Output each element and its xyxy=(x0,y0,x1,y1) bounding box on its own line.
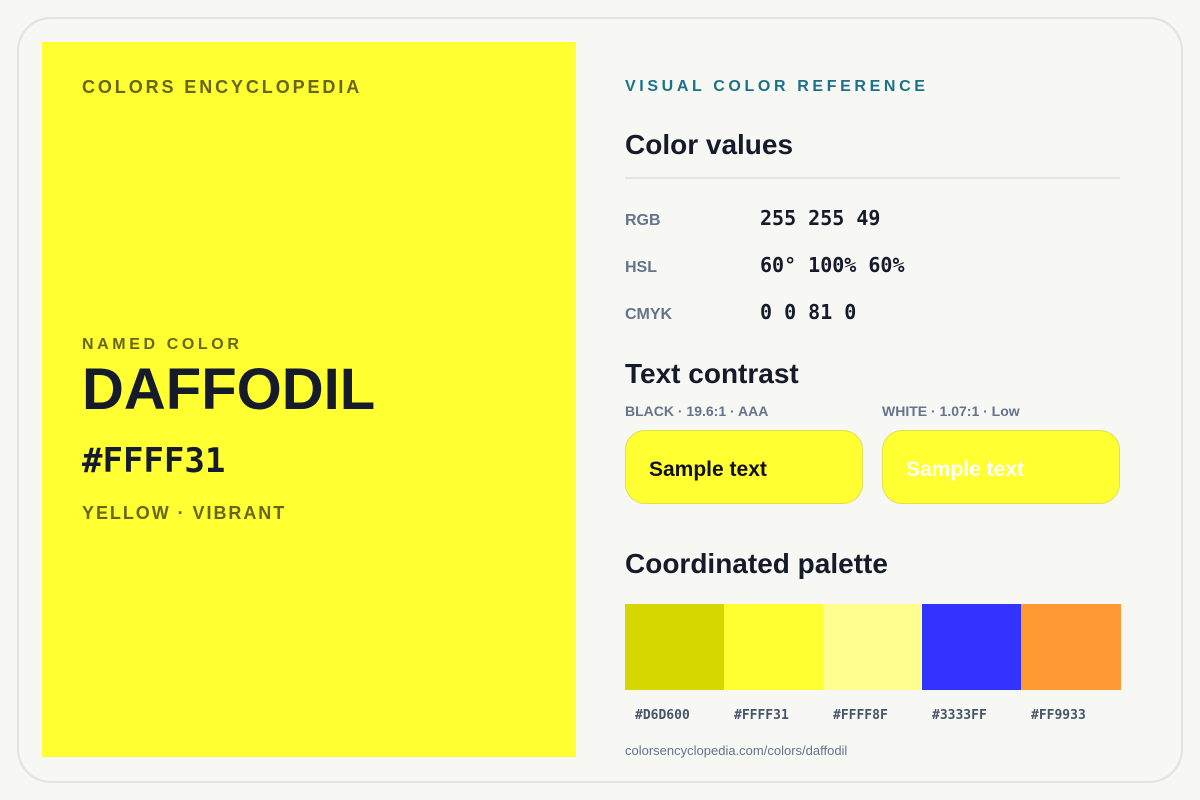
category tags: YELLOW · VIBRANT xyxy=(82,503,286,523)
HSL row xyxy=(625,253,904,277)
swatch 3333FF xyxy=(922,604,1021,690)
CMYK value: 0 0 81 0 xyxy=(760,300,856,324)
hex label FFFF8F: #FFFF8F xyxy=(833,708,888,723)
panel: color swatch xyxy=(42,42,576,757)
RGB value: 255 255 49 xyxy=(760,206,880,230)
swatch FFFF8F xyxy=(823,604,922,690)
heading: text contrast: Text contrast xyxy=(625,358,799,389)
hex label FF9933: #FF9933 xyxy=(1031,708,1086,723)
named color label: NAMED COLOR xyxy=(82,336,242,353)
color name: DAFFODIL xyxy=(82,357,375,422)
RGB row xyxy=(625,206,880,230)
source URL: colorsencyclopedia.com/colors/daffodil xyxy=(625,743,847,758)
white contrast label: WHITE · 1.07:1 · Low xyxy=(882,403,1020,419)
hex label FFFF31: #FFFF31 xyxy=(734,708,789,723)
eyebrow label: VISUAL COLOR REFERENCE xyxy=(625,78,929,95)
hex label 3333FF: #3333FF xyxy=(932,708,987,723)
hex label D6D600: #D6D600 xyxy=(635,708,690,723)
palette strip xyxy=(625,604,1121,690)
heading: color values: Color values xyxy=(625,129,793,160)
black sample box: Sample text xyxy=(649,458,767,481)
CMYK row xyxy=(625,300,856,324)
divider xyxy=(625,177,1120,179)
RGB label: RGB xyxy=(625,212,661,229)
white sample box xyxy=(882,430,1120,504)
black sample box xyxy=(625,430,863,504)
swatch FF9933 xyxy=(1021,604,1121,690)
heading: coordinated palette: Coordinated palette xyxy=(625,548,888,579)
hex code: #FFFF31 xyxy=(82,441,225,481)
brand label: COLORS ENCYCLOPEDIA xyxy=(82,77,362,97)
black contrast label: BLACK · 19.6:1 · AAA xyxy=(625,403,768,419)
HSL value: 60° 100% 60% xyxy=(760,253,904,277)
swatch FFFF31 xyxy=(724,604,823,690)
swatch D6D600 xyxy=(625,604,724,690)
white sample box: Sample text xyxy=(906,458,1024,481)
HSL label: HSL xyxy=(625,259,657,276)
CMYK label: CMYK xyxy=(625,306,672,323)
